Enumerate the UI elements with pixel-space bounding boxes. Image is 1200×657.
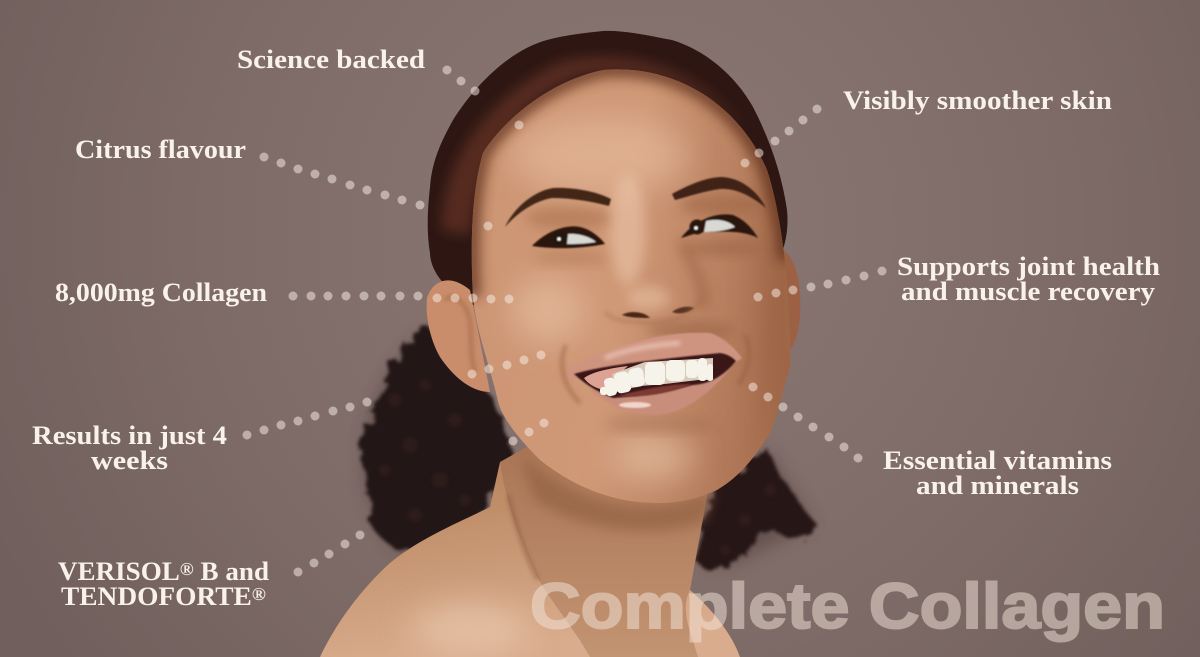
dots: Science backed [442,66,524,130]
hair halo right [700,450,812,565]
hair reddish sheen [442,57,745,235]
hairline soft edge [472,69,785,297]
label: Essential vitamins and minerals: Essential vitamins [883,446,1112,475]
label: Results in just 4 weeks: weeks [91,446,168,475]
dots: 8,000mg Collagen [288,292,514,304]
label: Visibly smoother skin: Visibly smoother skin [843,86,1113,115]
curl texture [379,379,776,555]
label: VERISOL B and TENDOFORTE [58,557,270,611]
right side shadow [760,213,790,426]
dots: VERISOL [294,418,548,576]
upper lip sheen [605,343,680,358]
dotted connectors [242,66,886,576]
label: VERISOL B and TENDOFORTE: VERISOL [58,557,175,586]
label: Essential vitamins and minerals [883,446,1112,500]
neck [500,445,710,657]
mouth interior [574,353,736,398]
label: Supports joint health and muscle recovery: and muscle recovery [901,277,1155,306]
hair top [428,31,788,305]
label: VERISOL B and TENDOFORTE: ® [180,559,194,579]
label: VERISOL B and TENDOFORTE: TENDOFORTE [61,582,242,611]
eyebrow left [505,188,611,227]
lower lip shade [605,418,715,432]
dots: Supports joint health [754,266,886,302]
lower lip highlight [619,402,651,408]
curly hair right [696,448,815,568]
label: Science backed: Science backed [237,45,426,74]
neck fold [508,495,538,580]
dots: Essential vitamins [748,382,862,462]
ear inner [445,297,475,372]
product name watermark: Complete Collagen [530,570,1165,642]
upper lip shade [645,322,735,338]
shoulder [320,462,740,657]
label: VERISOL B and TENDOFORTE: ® [252,584,266,604]
forehead highlight [510,115,690,195]
curly hair left [362,325,520,552]
eye right [681,214,758,238]
label: Supports joint health and muscle recovery: Supports joint health [897,252,1161,281]
mouth [567,333,742,415]
cheek highlight [510,276,586,344]
label: 8,000mg Collagen: 8,000mg Collagen [55,278,268,307]
under-eye shade left [539,250,600,266]
ear right [783,250,800,352]
label: VERISOL B and TENDOFORTE: B and [194,557,270,586]
dots: Results in just 4 weeks [242,350,546,440]
label: Results in just 4 weeks: Results in just 4 [32,421,227,450]
teeth backing [612,358,713,392]
smile lines [562,335,749,403]
nose shadow [678,242,710,307]
shoulder highlight [410,604,530,652]
label: Supports joint health and muscle recovery [897,252,1161,306]
lower lip [590,366,732,415]
eyebrow right [672,177,766,208]
nose [605,286,702,323]
eye socket shade right [680,194,760,216]
label: Citrus flavour: Citrus flavour [75,135,246,164]
chin highlight [610,433,694,481]
gum [584,366,628,390]
eye socket shade left [526,206,610,230]
label: Essential vitamins and minerals: and minerals [916,471,1079,500]
eye left [532,226,605,248]
face [472,69,790,503]
photo: smiling woman [320,31,820,657]
neck shadow [525,465,718,533]
nose bridge highlight [610,175,646,285]
dots: Citrus flavour [260,152,492,230]
dots: Visibly smoother skin [740,104,822,168]
teeth [600,358,713,397]
ear left [427,280,490,392]
upper lip [567,333,742,380]
tongue shade [618,384,692,396]
hair halo left [358,339,412,554]
under-eye shade right [690,239,750,257]
label: Results in just 4 weeks [32,421,227,475]
